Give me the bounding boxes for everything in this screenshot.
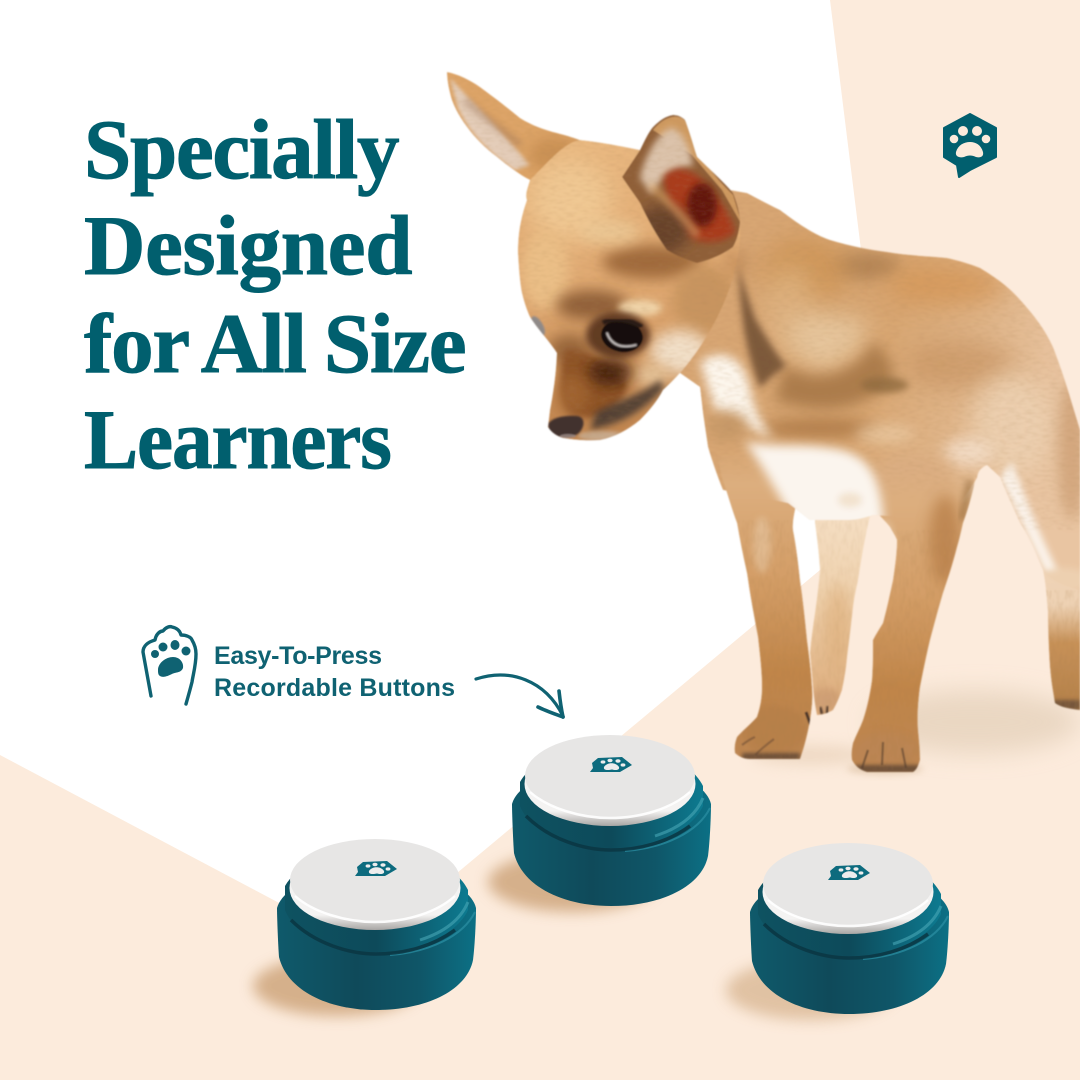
dog: right ear [622, 114, 740, 264]
dog: head [510, 140, 750, 445]
dog: white belly [745, 442, 884, 530]
callout text: easy-to-press recordable buttons: Easy-To-Press [214, 642, 382, 670]
dog: near front leg left [722, 468, 814, 760]
icon: brand logo speech hexagon with paw [944, 114, 996, 177]
title [84, 103, 465, 486]
dog: torso [663, 190, 1080, 592]
dog: neck shading [721, 248, 786, 388]
dog: nose [548, 416, 584, 438]
callout text: easy-to-press recordable buttons: Recordable Buttons [214, 674, 455, 702]
callout text: easy-to-press recordable buttons [214, 642, 455, 702]
title: for All Size [84, 297, 465, 391]
dog: near front leg right [852, 470, 978, 773]
dog [440, 65, 1080, 773]
arrow: callout pointing to button [476, 675, 563, 717]
title: Specially [84, 103, 399, 197]
title: Designed [84, 199, 412, 293]
dog: far front leg [810, 516, 870, 716]
dog: left ear [446, 71, 580, 181]
dog: near eye [586, 312, 650, 358]
button: left [253, 839, 476, 1016]
title: Learners [84, 392, 391, 486]
shadow: dog [750, 690, 1080, 775]
dog: hind leg [1043, 571, 1080, 711]
button: right [726, 843, 949, 1020]
button shadow [488, 852, 656, 912]
icon: paw raised [143, 627, 196, 704]
button: center [488, 735, 711, 912]
background: white angular panel [0, 0, 868, 949]
button shadow [726, 960, 894, 1020]
dog: far eye [530, 315, 546, 336]
button shadow [253, 956, 421, 1016]
